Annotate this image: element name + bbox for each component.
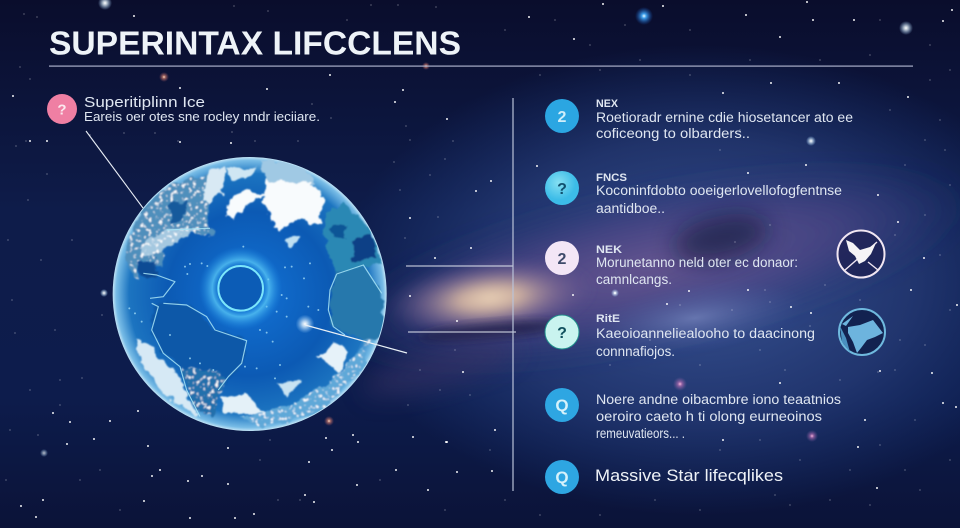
icon: mint question badge: ? <box>557 325 567 342</box>
icon: mint question badge <box>545 315 579 349</box>
icon: blue number badge: 2 <box>558 109 567 126</box>
step 3 <box>545 241 798 287</box>
step 1 text: coficeong to olbarders.. <box>596 126 750 141</box>
title: SUPERINTAX LIFCCLENS <box>49 24 461 62</box>
step 2 text: FNCS <box>596 172 627 184</box>
central glowing ring <box>202 250 280 327</box>
icon: cyan question badge <box>545 171 579 205</box>
globe sphere <box>113 157 387 431</box>
coastlines <box>143 228 382 417</box>
callout heading: Superitiplinn Ice <box>84 95 205 111</box>
step 5 <box>545 388 841 441</box>
icon: blue Q badge: Q <box>555 396 569 415</box>
step 1 text: NEX <box>596 98 619 110</box>
connector: upper link to timeline <box>406 265 513 267</box>
icon: cyan question badge: ? <box>557 181 567 198</box>
step 3 text: camnlcangs. <box>596 272 672 287</box>
continents and clouds <box>125 160 385 427</box>
step 6 label: Massive Star lifecqlikes <box>595 467 783 485</box>
step 1 text <box>596 98 853 141</box>
step 4 text: Kaeoioanneliealooho to daacinong <box>596 326 815 341</box>
step 2 text: aantidboe.. <box>596 201 665 216</box>
timeline vertical rule <box>512 98 514 491</box>
icon: pale lilac number badge <box>545 241 579 275</box>
step 3 text: NEK <box>596 244 622 256</box>
step 5 text <box>596 392 841 441</box>
step 4 text: RitE <box>596 313 620 325</box>
globe illustration <box>113 157 387 431</box>
step 1 <box>545 98 853 141</box>
step 4 <box>545 313 815 359</box>
step 2 text <box>596 172 842 216</box>
step 4 text: connnafiojos. <box>596 344 675 359</box>
icon: small earth globe <box>839 309 885 355</box>
step 6 <box>545 460 783 494</box>
icon: blue Q badge <box>545 388 579 422</box>
icon: blue Q badge: Q <box>555 468 569 487</box>
island speckles <box>129 247 318 378</box>
step 1 text: Roetioradr ernine cdie hiosetancer ato ee <box>596 110 853 125</box>
step 4 text <box>596 313 815 359</box>
step 5 text: oeroiro caeto h ti olong eurneoinos <box>596 409 822 424</box>
icon: blue number badge <box>545 99 579 133</box>
step 2 text: Koconinfdobto ooeigerlovellofogfentnse <box>596 183 842 198</box>
arrow: globe marker pointer <box>305 325 407 353</box>
callout description: Eareis oer otes sne rocley nndr ieciiare. <box>84 109 320 124</box>
step 2 <box>545 171 842 216</box>
callout: top-left label <box>47 94 320 124</box>
bright marker point <box>296 315 314 333</box>
icon: pink question badge: ? <box>57 102 67 118</box>
step 5 text: remeuvatieors... . <box>596 426 685 441</box>
arrow: callout to globe <box>86 131 143 208</box>
connector: lower link to timeline <box>408 331 516 333</box>
icon: blue Q badge <box>545 460 579 494</box>
icon: pink question badge <box>47 94 77 124</box>
icon: crossed-out continent <box>838 230 884 278</box>
title underline <box>49 66 913 67</box>
step 5 text: Noere andne oibacmbre iono teaatnios <box>596 392 841 407</box>
icon: pale lilac number badge: 2 <box>558 251 567 268</box>
step 3 text <box>596 244 798 287</box>
step 3 text: Morunetanno neld oter ec donaor: <box>596 255 798 270</box>
